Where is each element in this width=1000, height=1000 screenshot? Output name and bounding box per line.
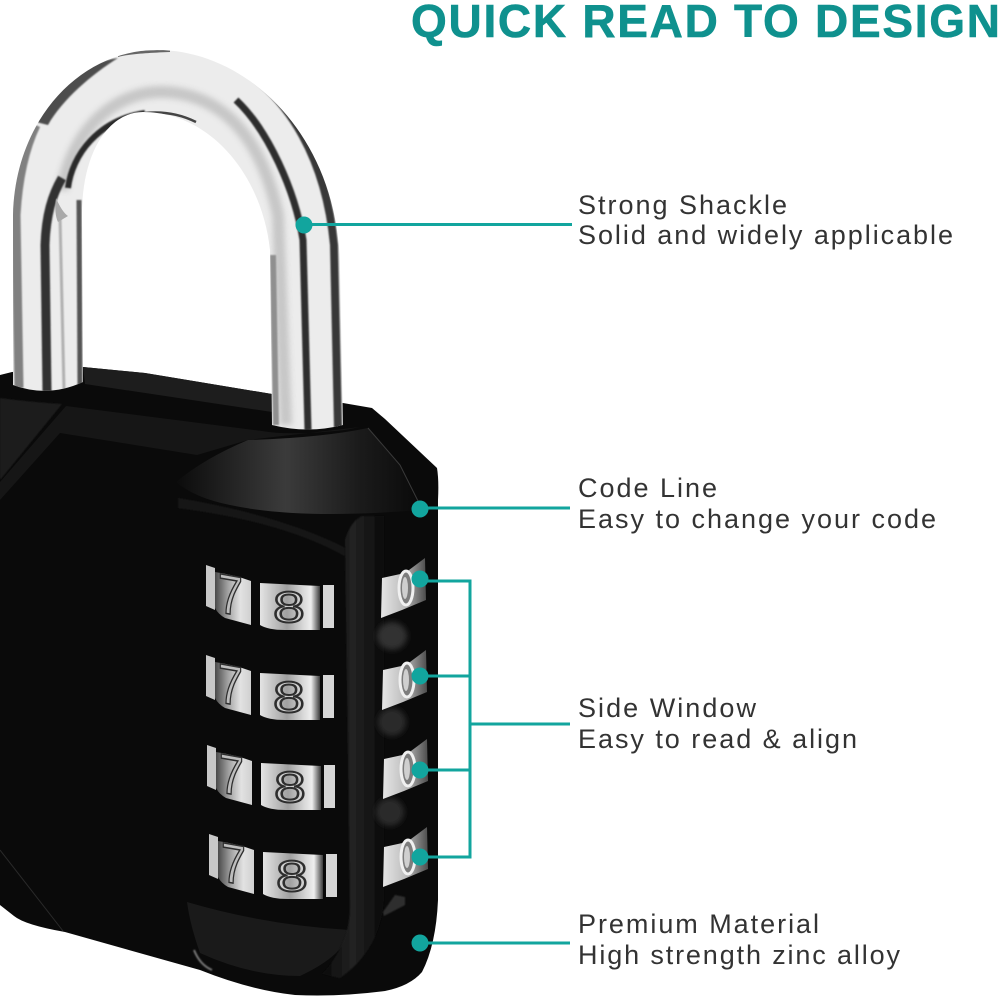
digit 7: 7 xyxy=(221,831,246,897)
digit 7: 7 xyxy=(218,652,243,718)
digit 7: 7 xyxy=(219,742,244,808)
digit wheels row 1 xyxy=(206,562,334,631)
digit 8: 8 xyxy=(274,762,306,811)
leader line xyxy=(420,942,570,944)
leader line xyxy=(420,506,570,510)
callout: side window xyxy=(412,570,857,866)
marker dots xyxy=(412,570,428,866)
soft inner reflection xyxy=(62,92,286,425)
callout text: Premium Material xyxy=(578,909,819,939)
leader line xyxy=(304,223,572,226)
icon: padlock body xyxy=(0,367,438,996)
icon: padlock shackle xyxy=(13,50,343,430)
callout text: High strength zinc alloy xyxy=(578,940,900,970)
bracket lines xyxy=(420,581,570,857)
callout text: Side Window xyxy=(578,693,756,723)
upper-left facet xyxy=(0,398,62,480)
marker dot xyxy=(412,934,428,952)
callout: strong shackle xyxy=(296,190,953,250)
top back face xyxy=(83,367,272,412)
callout text: Solid and widely applicable xyxy=(578,220,953,250)
edge line xyxy=(368,428,420,505)
digit wheels row 3 xyxy=(207,742,335,811)
side windows xyxy=(381,558,428,887)
digit 8: 8 xyxy=(273,582,305,631)
lower rim highlight xyxy=(194,950,212,970)
callout text: Code Line xyxy=(578,473,717,503)
digit wheels row 4 xyxy=(209,831,337,900)
digit 7: 7 xyxy=(218,562,243,628)
digit 8: 8 xyxy=(273,672,305,721)
marker dot xyxy=(412,500,428,518)
digit 8: 8 xyxy=(276,851,308,900)
callout: code line xyxy=(412,473,936,534)
marker dot xyxy=(296,216,312,234)
central vertical band xyxy=(322,516,384,978)
callout: premium material xyxy=(412,909,900,970)
callout text: Strong Shackle xyxy=(578,190,787,220)
front top bevel xyxy=(0,406,360,500)
lower dome xyxy=(187,902,350,976)
front recess ledge xyxy=(178,498,345,556)
callout text: Easy to read & align xyxy=(578,724,857,754)
callout text: Easy to change your code xyxy=(578,504,936,534)
side wheels shading xyxy=(377,622,407,650)
dome highlight xyxy=(176,428,420,514)
digit wheels row 2 xyxy=(206,652,334,721)
